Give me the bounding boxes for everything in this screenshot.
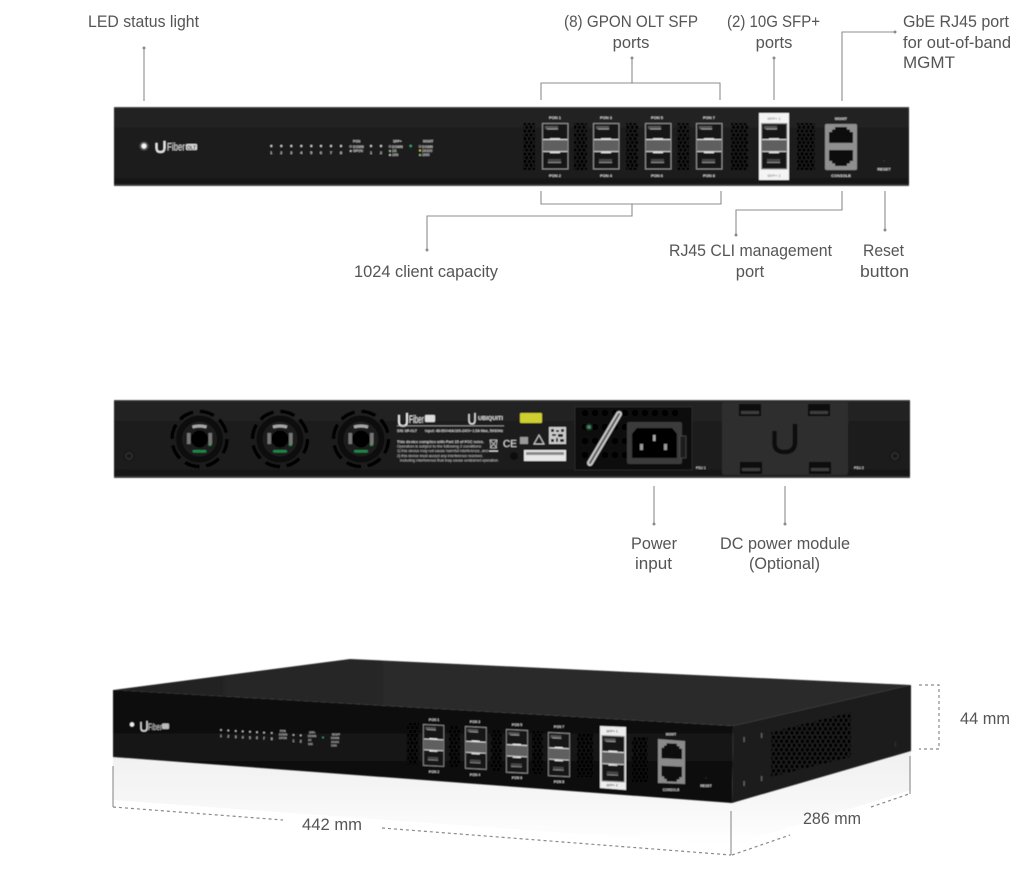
RJ45 ports: MGMT <box>666 732 677 736</box>
dimension: height 44 mm <box>919 685 1010 749</box>
reset label <box>700 777 713 788</box>
callout: power input <box>631 486 677 573</box>
RJ45 ports <box>658 732 685 792</box>
PON ports <box>423 718 570 784</box>
rear panel body <box>114 400 910 478</box>
PON SFP ports: PON 1 <box>549 115 562 120</box>
status LED row: 2 <box>280 150 283 155</box>
PON SFP ports: PON 7 <box>703 115 716 120</box>
callout: client capacity: 1024 client capacity <box>354 263 499 281</box>
status LEDs and legend: DOWN <box>331 736 339 740</box>
product label text: Input: 48-56V=6A/100-240V~1.5A Max, 50/60Hz <box>425 429 503 433</box>
product label text <box>397 413 504 462</box>
callout: LED status light: LED status light <box>88 13 199 31</box>
PON SFP ports: PON 6 <box>651 173 664 178</box>
callout: LED status light <box>88 13 199 101</box>
dimension: width 442 mm: 442 mm <box>302 816 362 834</box>
left screw <box>124 451 134 461</box>
callout: reset button <box>860 191 909 281</box>
PON SFP ports: PON 2 <box>549 173 562 178</box>
PON ports: PON 1 <box>429 718 439 722</box>
PON SFP ports: PON 4 <box>600 173 613 178</box>
LED legend: 10G <box>392 153 399 157</box>
LED legend: GPON <box>353 149 364 153</box>
PON ports: PON 5 <box>512 723 522 727</box>
status LEDs and legend <box>220 729 340 748</box>
dimension: height 44 mm: 44 mm <box>960 710 1010 728</box>
callout: reset button: button <box>860 263 909 281</box>
callout: DC power module <box>720 486 850 573</box>
reset button: RESET <box>877 166 891 172</box>
LED legend: MGMT <box>423 140 434 144</box>
LED legend: SFP+ <box>393 140 402 144</box>
front face <box>113 690 733 803</box>
AC power supply module: PSU 1 <box>696 466 706 470</box>
UFiber OLT logo: OLT <box>187 145 196 151</box>
status LEDs and legend: 3 <box>235 735 237 739</box>
status LEDs and legend: 10G <box>308 742 313 746</box>
callout: GbE RJ45 management port: for out-of-band <box>903 34 1011 52</box>
product label text: UBIQUITI <box>478 416 504 422</box>
callout: RJ45 CLI management port <box>669 191 842 281</box>
side face <box>732 685 911 803</box>
LED legend: DOWN <box>422 145 433 149</box>
status LEDs and legend: GPON <box>279 736 287 740</box>
status LEDs and legend: PON <box>280 729 286 733</box>
LED and logo <box>130 721 169 732</box>
status LEDs and legend: DOWN <box>308 734 316 738</box>
front vents <box>407 723 648 782</box>
dimension: depth 286 mm <box>732 756 910 855</box>
DC power module slot: PSU 2 <box>854 466 864 470</box>
callout: GPON OLT SFP ports: ports <box>613 34 649 52</box>
product label text: Operation is subject to the following 2 conditions: <box>397 444 482 448</box>
status LED row: 1 <box>370 150 373 155</box>
status LEDs and legend: 10/100 <box>331 740 339 744</box>
LED legend: 1000 <box>422 153 430 157</box>
UFiber OLT logo <box>156 141 197 154</box>
section: perspective view <box>113 659 911 803</box>
callout: DC power module: DC power module <box>720 535 850 553</box>
product label text: This device complies with Part 15 of FCC rules. <box>397 440 484 444</box>
vent grids <box>523 123 815 170</box>
product label text: 1) this device may not cause harmful interference, and <box>397 449 488 453</box>
section: front panel view <box>114 107 909 186</box>
LED legend: 1G <box>392 149 397 153</box>
status LEDs and legend: 6 <box>256 736 258 740</box>
callout: GPON OLT SFP ports <box>541 13 720 100</box>
status LEDs and legend: 2 <box>227 734 229 738</box>
status LED row: 2 <box>380 150 383 155</box>
10G SFP+ ports <box>759 113 789 180</box>
status LED row: 3 <box>290 150 293 155</box>
status LED row: 5 <box>310 150 313 155</box>
PON SFP ports: PON 8 <box>703 173 716 178</box>
regulatory marks, QR code and barcode: CE <box>503 439 517 450</box>
status LED row: 7 <box>330 150 333 155</box>
right screw <box>890 451 900 461</box>
status LEDs and legend: 7 <box>263 737 265 741</box>
callout: 10G SFP+ ports: (2) 10G SFP+ <box>727 13 820 31</box>
product label text: Fiber <box>409 414 424 426</box>
callout: reset button: Reset <box>863 242 904 260</box>
RJ45 ports: CONSOLE <box>663 788 680 792</box>
MGMT and console RJ45 ports: MGMT <box>835 116 848 121</box>
side vent <box>771 712 851 777</box>
PON ports: PON 2 <box>429 770 439 774</box>
LED status light indicator <box>140 142 148 150</box>
side screws <box>744 733 896 786</box>
LED legend <box>350 140 434 157</box>
callout: GbE RJ45 management port: GbE RJ45 port <box>903 13 1009 31</box>
MGMT and console RJ45 ports: CONSOLE <box>831 173 851 178</box>
status LEDs and legend: DOWN <box>279 732 287 736</box>
callout: power input: Power <box>631 535 677 553</box>
product label text: S/N: UF-OLT <box>397 429 418 433</box>
UFiber OLT logo: Fiber <box>167 142 185 154</box>
LED legend: DOWN <box>353 145 364 149</box>
callout: GPON OLT SFP ports: (8) GPON OLT SFP <box>564 13 698 31</box>
callout: 10G SFP+ ports <box>727 13 820 100</box>
10G SFP+ ports: SFP+ 1 <box>767 116 782 121</box>
LED and logo: Fiber <box>148 722 162 732</box>
section: rear panel view <box>114 400 910 478</box>
reset label: RESET <box>700 784 713 788</box>
reset button <box>877 160 891 172</box>
callout: RJ45 CLI management port: RJ45 CLI management <box>669 242 832 260</box>
product label text: 2) this device must accept any interference received, <box>397 454 483 458</box>
callout: RJ45 CLI management port: port <box>736 263 765 281</box>
status LEDs and legend: 5 <box>249 736 251 740</box>
status LEDs and legend: 4 <box>242 735 244 739</box>
front panel body <box>114 107 909 186</box>
SFP+ ports: SFP+ 1 <box>606 730 618 734</box>
callout: client capacity <box>354 191 721 281</box>
callout: GbE RJ45 management port: MGMT <box>903 54 955 72</box>
PON ports: PON 7 <box>554 725 564 729</box>
regulatory marks, QR code and barcode <box>489 413 566 461</box>
MGMT and console RJ45 ports <box>825 116 857 178</box>
status LED row: 1 <box>270 150 273 155</box>
PON ports: PON 3 <box>470 720 480 724</box>
status LED row: 8 <box>340 150 343 155</box>
SFP+ ports <box>600 726 626 790</box>
SFP+ ports: SFP+ 2 <box>606 784 618 788</box>
status LEDs and legend: 1 <box>220 734 222 738</box>
callout: 10G SFP+ ports: ports <box>756 34 792 52</box>
status LEDs and legend: 1 <box>293 739 295 743</box>
PON SFP ports: PON 3 <box>600 115 613 120</box>
10G SFP+ ports: SFP+ 2 <box>767 173 782 178</box>
product label text: including interference that may cause undesired operation. <box>400 458 499 462</box>
floor reflection <box>113 751 911 845</box>
PON SFP ports: PON 5 <box>651 115 664 120</box>
dimension: width 442 mm <box>113 766 731 855</box>
LED legend: PON <box>353 140 361 144</box>
LED legend: 10/100 <box>422 149 432 153</box>
dimension: depth 286 mm: 286 mm <box>803 810 861 828</box>
status LEDs and legend: 2 <box>300 739 302 743</box>
callout: DC power module: (Optional) <box>749 555 820 573</box>
PON ports: PON 8 <box>554 780 564 784</box>
AC power supply module <box>575 407 706 470</box>
DC power module slot <box>722 402 864 475</box>
PON ports: PON 4 <box>470 773 480 777</box>
callout: GbE RJ45 management port <box>842 13 1011 101</box>
status LEDs and legend: MGMT <box>332 732 340 736</box>
PON SFP ports <box>542 115 722 178</box>
status LEDs and legend: 8 <box>271 737 273 741</box>
status LEDs and legend: 1000 <box>331 744 337 748</box>
status LEDs and legend: SFP+ <box>309 730 316 734</box>
status LED row: 6 <box>320 150 323 155</box>
cooling fans <box>172 412 388 466</box>
LED legend: DOWN <box>392 145 403 149</box>
callout: power input: input <box>635 555 672 573</box>
PON ports: PON 6 <box>512 776 522 780</box>
status LEDs and legend: 1G <box>308 738 311 742</box>
top surface <box>113 659 911 726</box>
status LED row <box>270 145 383 155</box>
status LED row: 4 <box>300 150 303 155</box>
